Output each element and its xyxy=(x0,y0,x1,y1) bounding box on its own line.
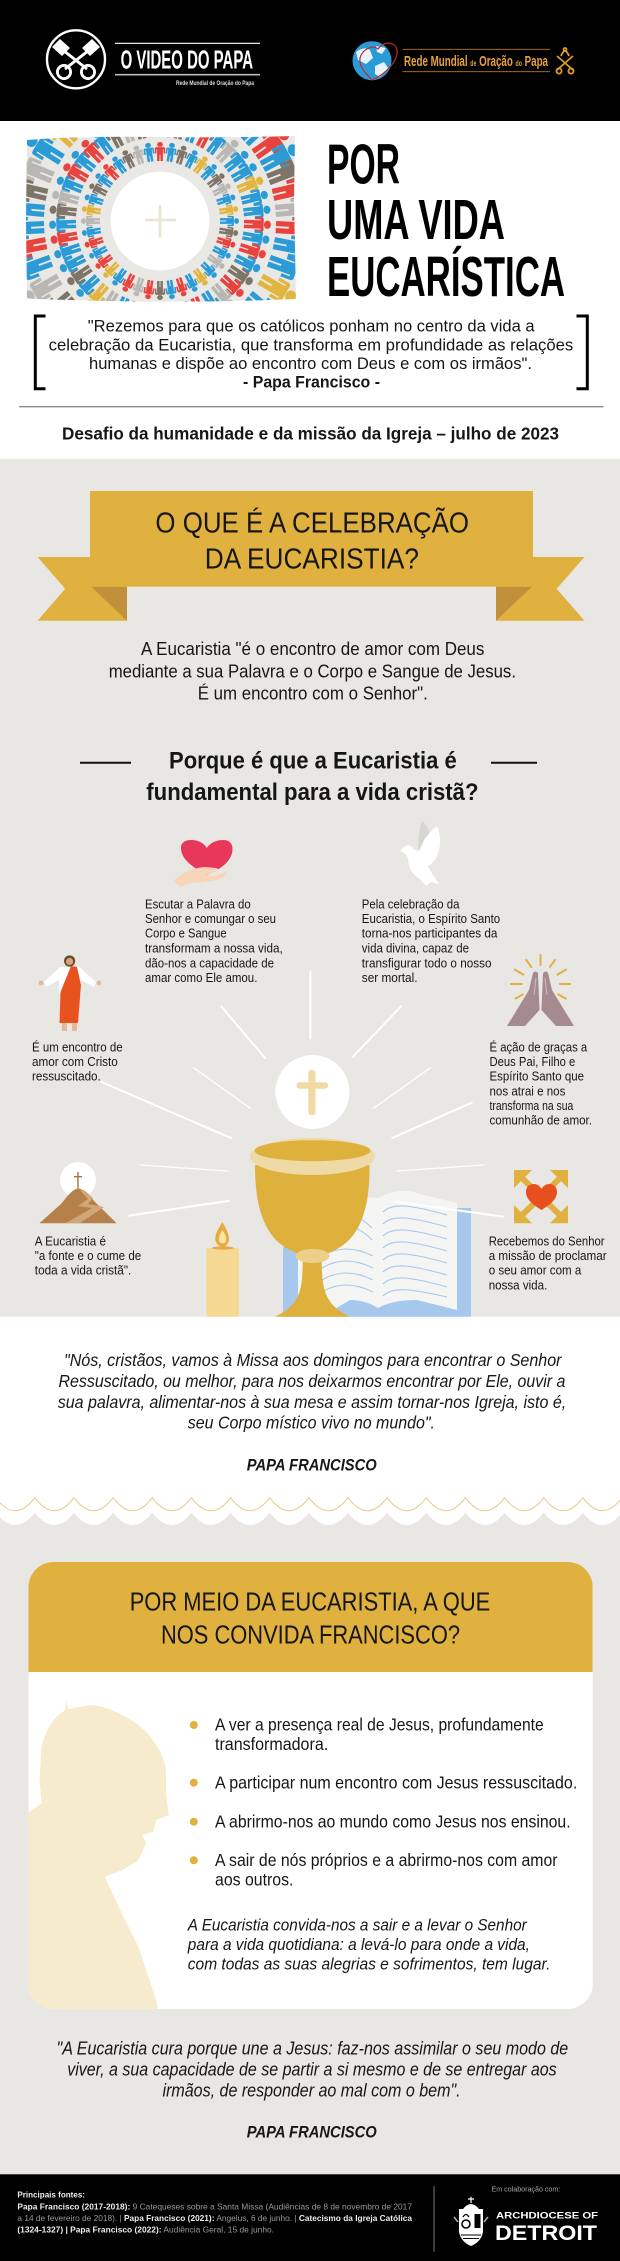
text: listening to the Word: Corpo e Sangue xyxy=(145,926,227,941)
italic closing text: com todas as suas alegrias e sofrimentos, tem lugar. xyxy=(188,1954,550,1973)
host circle with cross xyxy=(110,172,210,270)
bracket left xyxy=(35,316,46,389)
text: thanksgiving: É ação de graças a xyxy=(490,1039,588,1054)
quote: Sunday Mass: seu Corpo místico vivo no mundo". xyxy=(188,1413,435,1433)
text: encounter with Christ xyxy=(32,1039,123,1084)
definition text: A Eucaristia "é o encontro de amor com Deus xyxy=(141,639,484,659)
logo wordmark: O Video do Papa: O VIDEO DO PAPA xyxy=(121,46,253,74)
bullet list: aos outros. xyxy=(215,1869,293,1889)
text: source and summit: toda a vida cristã". xyxy=(35,1263,131,1278)
card heading: NOS CONVIDA FRANCISCO? xyxy=(161,1621,460,1649)
text: Holy Spirit: vida divina, capaz de xyxy=(362,941,469,956)
bullet list: transformadora. xyxy=(215,1734,328,1754)
text: thanksgiving xyxy=(490,1039,592,1128)
bullet list: A ver a presença real de Jesus, profundamente xyxy=(215,1715,544,1735)
quote text xyxy=(49,318,573,392)
logo: Rede Mundial de Oração do Papa globe xyxy=(352,41,397,80)
quote text: "Rezemos para que os católicos ponham no centro da vida a xyxy=(88,318,535,336)
text: listening to the Word: amar como Ele amou. xyxy=(145,970,257,985)
crest: Archdiocese of Detroit xyxy=(454,2197,488,2246)
text: thanksgiving: transforma na sua xyxy=(490,1098,574,1113)
italic closing text: A Eucaristia convida-nos a sair e a levar o Senhor xyxy=(187,1916,528,1935)
icon: open book xyxy=(283,1191,504,1317)
text: mission to proclaim: a missão de proclamar xyxy=(489,1248,607,1263)
sub-heading with dashes xyxy=(80,747,537,806)
text: source and summit xyxy=(35,1233,141,1278)
text: Holy Spirit: Eucaristia, o Espírito Santo xyxy=(362,911,500,926)
scallop divider xyxy=(0,1498,620,1525)
wordmark: Archdiocese of Detroit xyxy=(495,2210,598,2245)
logo wordmark: O Video do Papa xyxy=(115,43,260,87)
icon: candle xyxy=(206,1222,239,1317)
ring of people xyxy=(26,136,296,302)
sources: Papa Francisco (2017-2018): 9 Catequeses sobre a Santa Missa (Audiências de 8 de novembro de 2017 xyxy=(17,2201,412,2211)
panel: what is the Eucharist xyxy=(0,459,620,1317)
quote: the Eucharist heals xyxy=(56,2037,568,2142)
text: encounter with Christ: ressuscitado. xyxy=(32,1069,101,1084)
ribbon heading: O QUE É A CELEBRAÇÃO xyxy=(155,506,469,540)
header band xyxy=(0,0,620,121)
icon: dove xyxy=(400,821,440,886)
light rays xyxy=(101,971,484,1216)
hero image: ring of people around the host xyxy=(26,136,296,302)
text: thanksgiving: nos atrai e nos xyxy=(490,1083,566,1098)
title: UMA VIDA xyxy=(327,188,505,252)
wordmark: Archdiocese of Detroit: DETROIT xyxy=(495,2222,597,2245)
sources: Principais fontes: xyxy=(17,2189,85,2199)
bullet list: A sair de nós próprios e a abrirmo-nos com amor xyxy=(215,1850,558,1870)
text: Holy Spirit: transfigurar todo o nosso xyxy=(362,955,492,970)
card header xyxy=(28,1562,593,1672)
logo: O Video do Papa keys xyxy=(47,30,105,88)
card body xyxy=(28,1562,593,2009)
silhouette of Pope Francis xyxy=(28,1701,169,2010)
quote: Sunday Mass: Ressuscitado, ou melhor, para nos deixarmos encontrar por Ele, ouvir a xyxy=(58,1371,566,1391)
definition text: É um encontro com o Senhor". xyxy=(198,683,428,703)
text: listening to the Word xyxy=(145,896,283,985)
text: Holy Spirit xyxy=(362,896,500,985)
title xyxy=(327,132,565,309)
italic closing text: para a vida quotidiana: a levá-lo para onde a vida, xyxy=(187,1935,530,1954)
title: POR xyxy=(327,132,400,196)
text: listening to the Word: Senhor e comungar o seu xyxy=(145,911,276,926)
definition text: mediante a sua Palavra e o Corpo e Sangue de Jesus. xyxy=(109,661,516,681)
icon: chalice xyxy=(250,1138,375,1317)
italic closing text xyxy=(187,1916,550,1973)
text: thanksgiving: comunhão de amor. xyxy=(490,1113,592,1128)
sources: (1324-1327) | Papa Francisco (2022): Audiência Geral, 15 de junho. xyxy=(17,2225,274,2235)
icon: heart with outward arrows xyxy=(514,1170,568,1223)
monthly intention quote with brackets xyxy=(35,316,587,392)
quote text: celebração da Eucaristia, que transforma em profundidade as relações xyxy=(49,336,573,354)
attribution: PAPA FRANCISCO xyxy=(247,2123,377,2142)
text: encounter with Christ: amor com Cristo xyxy=(32,1054,118,1069)
icon: heart in hand xyxy=(174,840,232,887)
card heading: POR MEIO DA EUCARISTIA, A QUE xyxy=(130,1589,490,1617)
text: thanksgiving: Espírito Santo que xyxy=(490,1069,584,1084)
subtitle: Desafio da humanidade e da missão da Igreja – julho de 2023 xyxy=(62,423,559,443)
ribbon heading xyxy=(38,491,585,621)
bullet list: A participar num encontro com Jesus ressuscitado. xyxy=(215,1773,577,1793)
text: mission to proclaim: nossa vida. xyxy=(489,1277,547,1292)
text: listening to the Word: Escutar a Palavra do xyxy=(145,896,251,911)
sources: a 14 de fevereiro de 2018). | Papa Francisco (2021): Angelus, 6 de junho. | Catecismo da Igreja Católica xyxy=(17,2213,412,2223)
bullet list xyxy=(190,1715,577,1889)
text: Holy Spirit: torna-nos participantes da xyxy=(362,926,498,941)
bullet list: A abrirmo-nos ao mundo como Jesus nos ensinou. xyxy=(215,1811,571,1831)
card heading xyxy=(130,1589,490,1649)
sub-heading with dashes: fundamental para a vida cristã? xyxy=(146,779,479,806)
text: listening to the Word: transformam a nossa vida, xyxy=(145,941,283,956)
text: listening to the Word: dão-nos a capacidade de xyxy=(145,955,274,970)
text: thanksgiving: Deus Pai, Filho e xyxy=(490,1054,575,1069)
quote: Sunday Mass: sua palavra, alimentar-nos à sua mesa e assim tornar-nos Igreja, isto é, xyxy=(58,1392,566,1412)
icon: praying hands xyxy=(507,954,574,1026)
quote: Sunday Mass: "Nós, cristãos, vamos à Missa aos domingos para encontrar o Senhor xyxy=(64,1350,563,1370)
ribbon heading: DA EUCARISTIA? xyxy=(205,543,419,575)
logo wordmark: O Video do Papa: Rede Mundial de Oração do Papa xyxy=(176,80,254,87)
attribution: PAPA FRANCISCO xyxy=(247,1456,377,1475)
panel: what Francis invites us to xyxy=(28,1562,593,2010)
panel: lower grey background xyxy=(0,1510,620,2175)
icon: mountain with cross xyxy=(40,1162,117,1223)
text: Holy Spirit: ser mortal. xyxy=(362,970,418,985)
icon: risen Christ xyxy=(39,955,101,1031)
quote text: humanas e dispõe ao encontro com Deus e com os irmãos". xyxy=(89,355,532,373)
collaboration label: Em colaboração com: xyxy=(492,2185,560,2194)
wordmark: Archdiocese of Detroit: ARCHDIOCESE OF xyxy=(496,2210,598,2221)
quote: the Eucharist heals: viver, a sua capacidade de se partir a si mesmo e de se entregar aos xyxy=(67,2058,557,2079)
icon: host with cross xyxy=(275,1055,349,1129)
text: Holy Spirit: Pela celebração da xyxy=(362,896,460,911)
text: mission to proclaim xyxy=(489,1233,607,1292)
logo wordmark: Rede Mundial: Rede Mundial de Oração do Papa xyxy=(404,53,548,70)
text: encounter with Christ: É um encontro de xyxy=(32,1039,123,1054)
text: mission to proclaim: Recebemos do Senhor xyxy=(489,1233,605,1248)
definition text xyxy=(109,639,516,703)
sub-heading with dashes: Porque é que a Eucaristia é xyxy=(169,747,457,774)
quote text: - Papa Francisco - xyxy=(243,374,380,392)
quote: Sunday Mass xyxy=(58,1350,566,1475)
sources xyxy=(17,2189,412,2235)
text: source and summit: A Eucaristia é xyxy=(35,1233,106,1248)
logo: gold papal keys xyxy=(556,48,574,74)
text: source and summit: "a fonte e o cume de xyxy=(35,1248,141,1263)
bracket right xyxy=(576,316,587,389)
footer xyxy=(0,2174,620,2261)
text: mission to proclaim: o seu amor com a xyxy=(489,1263,582,1278)
quote: the Eucharist heals: irmãos, de responder ao mal com o bem". xyxy=(162,2079,461,2100)
